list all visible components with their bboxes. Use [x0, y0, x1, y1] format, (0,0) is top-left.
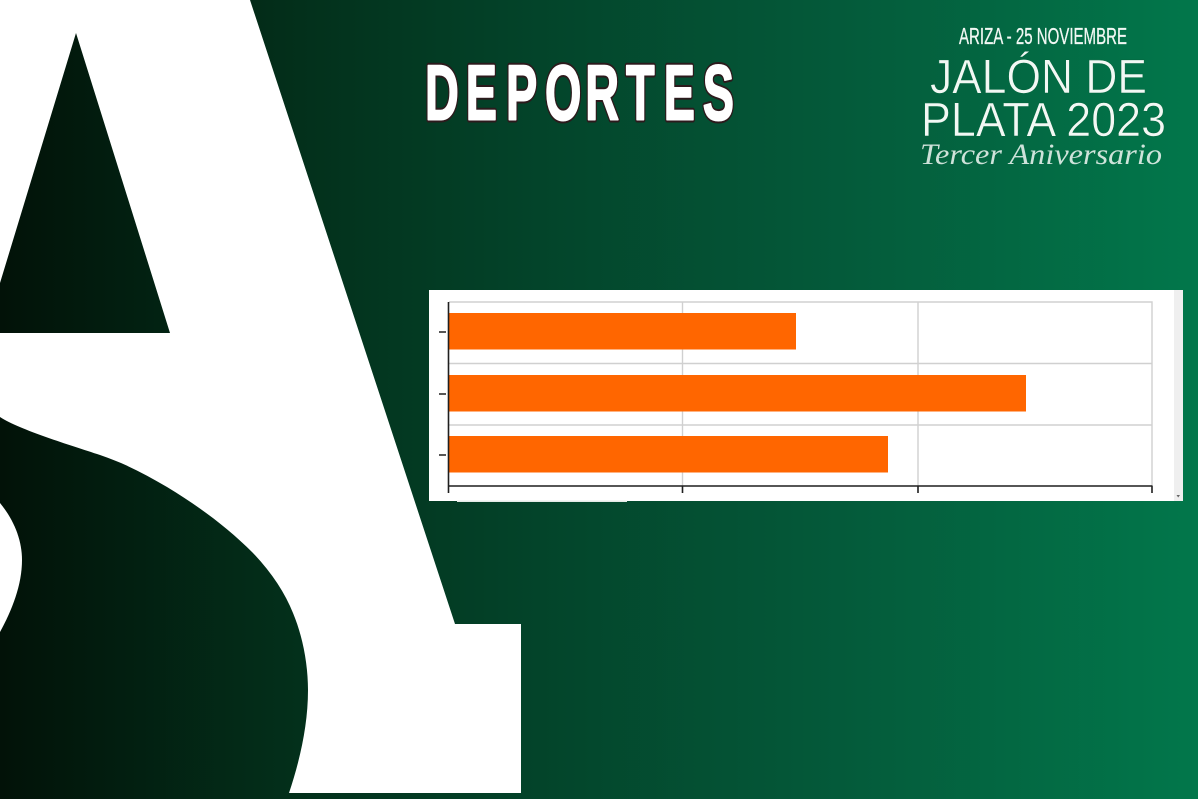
title: DEPORTES: DEPORTES	[425, 49, 734, 136]
event name line 1: JALÓN DE	[930, 50, 1147, 104]
event name line 2: PLATA 2023	[921, 94, 1166, 147]
anniversary subtitle: Tercer Aniversario	[920, 138, 1162, 171]
chart axes and ticks	[439, 302, 1152, 493]
bar chart panel	[429, 290, 1183, 502]
large white logo letter shape	[0, 0, 521, 793]
title: DEPORTES: DEPORTES	[425, 49, 734, 136]
event logo: Jalón de Plata 2023	[920, 23, 1166, 171]
bar: top	[449, 313, 796, 350]
bar: bottom	[449, 436, 888, 472]
bar: middle	[449, 375, 1026, 412]
